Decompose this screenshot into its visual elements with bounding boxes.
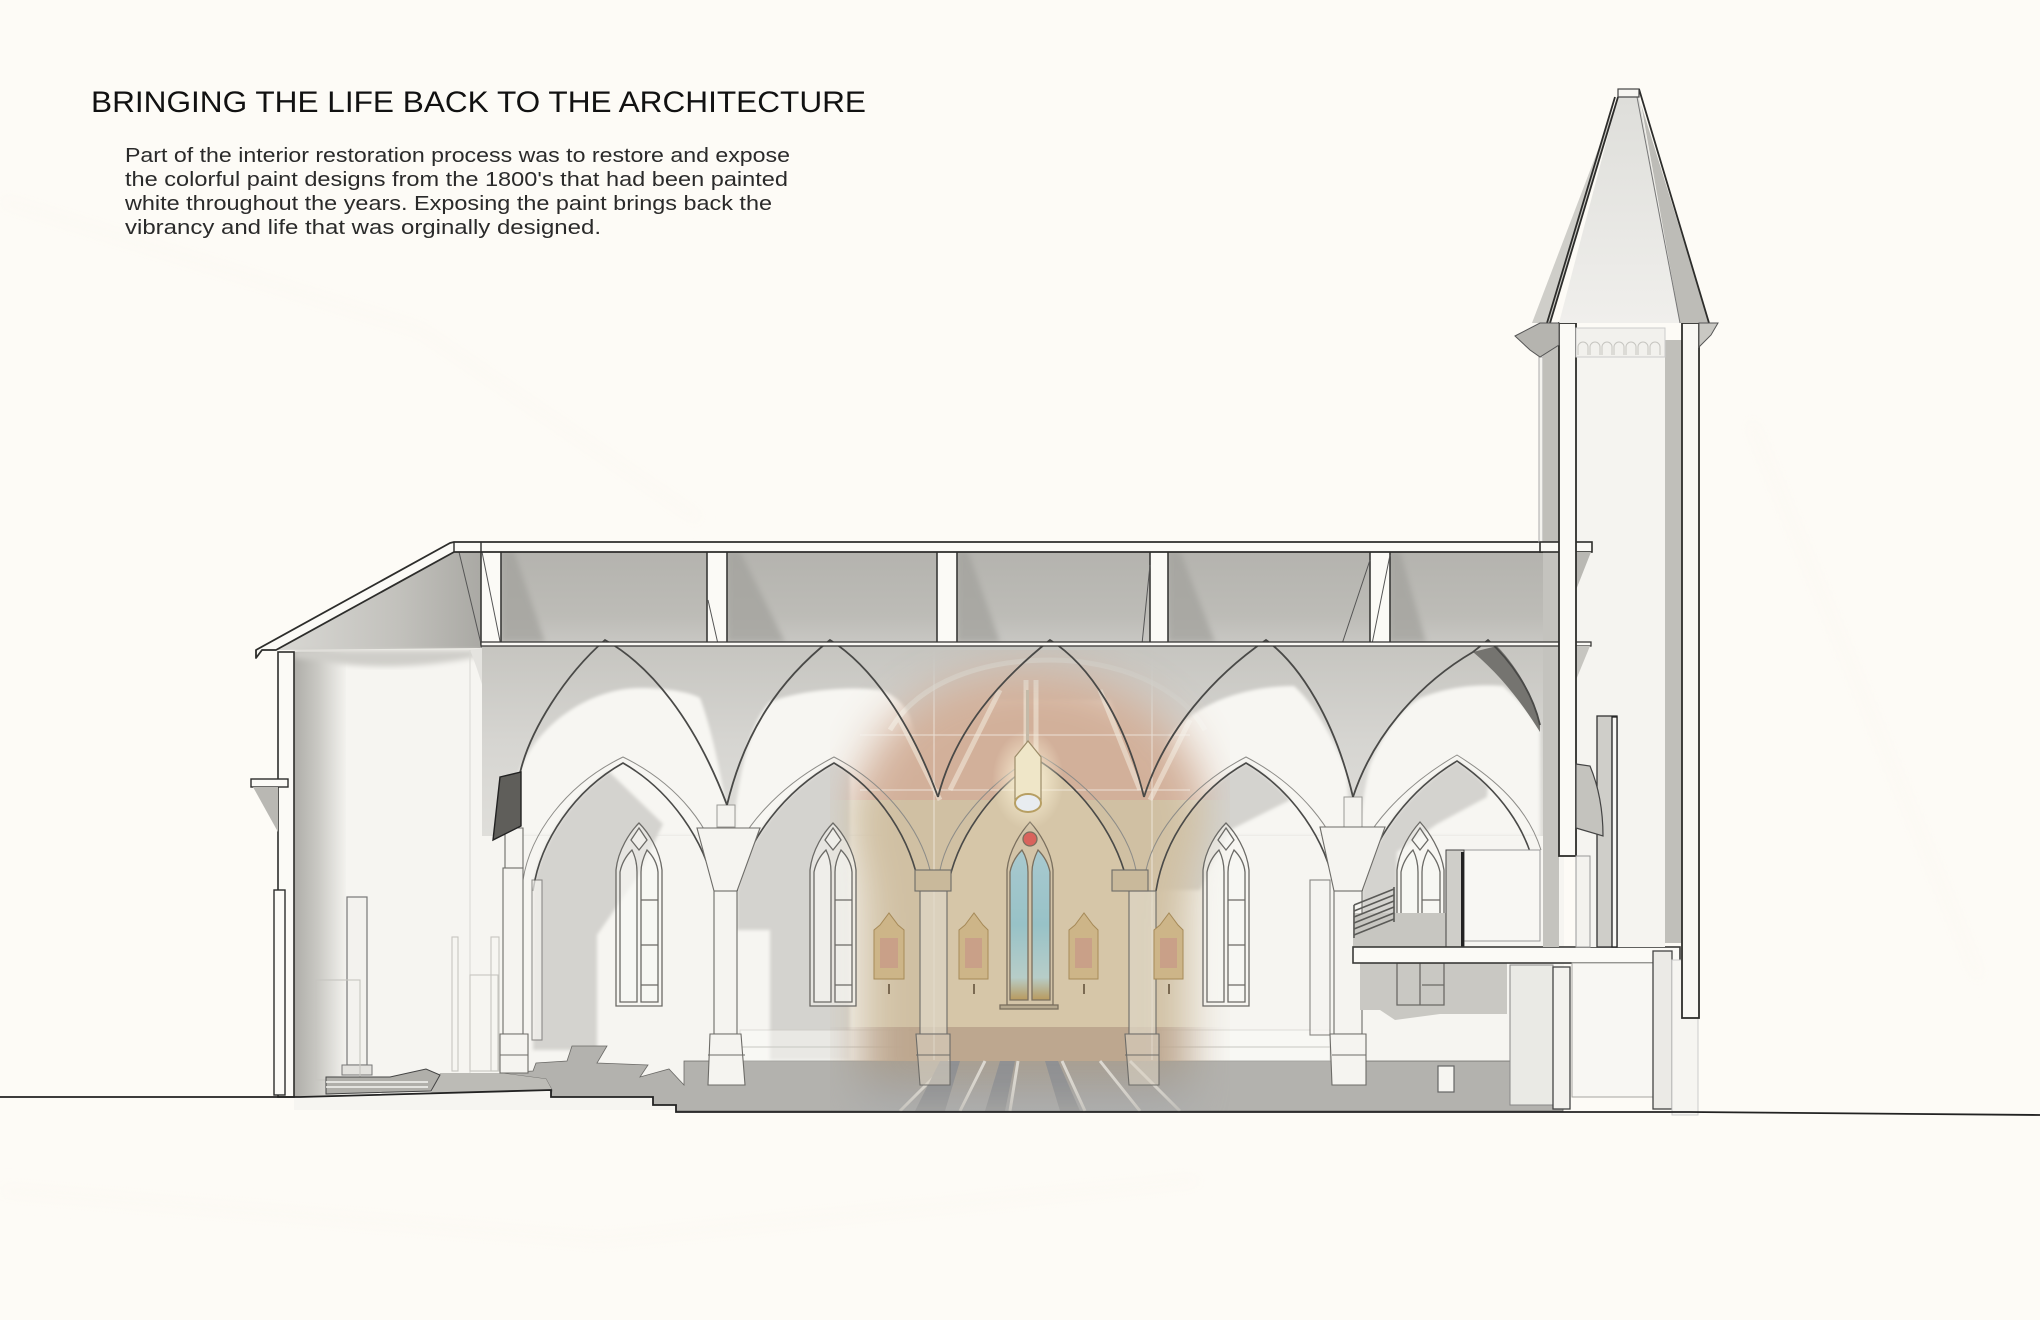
- column bases: [500, 1034, 1366, 1085]
- truss shadows: [501, 551, 1426, 642]
- tower frieze: [1576, 328, 1665, 357]
- ground line: [0, 1090, 2040, 1115]
- stained glass window: [1000, 822, 1058, 1009]
- wall shadows inside arches: [530, 760, 1490, 1060]
- roof and ceiling slab junction: [481, 542, 1592, 680]
- hanging lantern: [992, 690, 1064, 830]
- infographic canvas: [0, 88, 2040, 1116]
- title: BRINGING THE LIFE BACK TO THE ARCHITECTURE: [91, 86, 866, 119]
- floor and stair profile: [431, 1030, 1563, 1111]
- attic space with trusses: [276, 550, 1563, 760]
- stations of the cross panels: [874, 913, 1183, 994]
- left side column, door and platform: [316, 897, 499, 1094]
- capital blocks: [505, 827, 1385, 891]
- pendant blocks: [717, 797, 1362, 827]
- window 4: [1203, 823, 1249, 1006]
- description text: [124, 145, 790, 239]
- left room shaded wall: [294, 648, 521, 1097]
- lower part of window 5: [1397, 963, 1444, 1005]
- left wall and roof: [251, 542, 1543, 1097]
- balcony railing: [1354, 887, 1394, 938]
- nave wall base: [294, 650, 1564, 1110]
- tower inner column: [1597, 716, 1617, 947]
- vault shading: [482, 646, 1560, 836]
- spire: [1515, 89, 1718, 357]
- column shafts: [503, 868, 1362, 1040]
- columns: [500, 827, 1385, 1085]
- truss posts: [481, 551, 1390, 644]
- description text: Part of the interior restoration process was to restore and expose: [125, 145, 790, 167]
- window 1: [616, 823, 662, 1006]
- balcony and gallery: [1353, 850, 1680, 1020]
- description text: white throughout the years. Exposing the paint brings back the: [124, 193, 772, 215]
- arcade arches: [523, 754, 1541, 891]
- description text: vibrancy and life that was orginally designed.: [125, 217, 601, 239]
- dark side bracket: [493, 772, 521, 840]
- window 5: [1397, 822, 1444, 1005]
- tower shaft: [481, 323, 1699, 1018]
- window 2: [810, 823, 856, 1006]
- description text: the colorful paint designs from the 1800's that had been painted: [125, 169, 788, 191]
- cornice left: [1515, 323, 1559, 357]
- lower tower room: [1438, 951, 1698, 1115]
- cornice right: [1699, 323, 1718, 347]
- vault rib lines: [520, 640, 1540, 805]
- dark vault band: [1473, 646, 1540, 732]
- restored colour zone: [830, 650, 1230, 1111]
- church section drawing: [0, 89, 2040, 1115]
- coloured capitals: [915, 870, 1148, 891]
- gothic windows: [616, 822, 1444, 1009]
